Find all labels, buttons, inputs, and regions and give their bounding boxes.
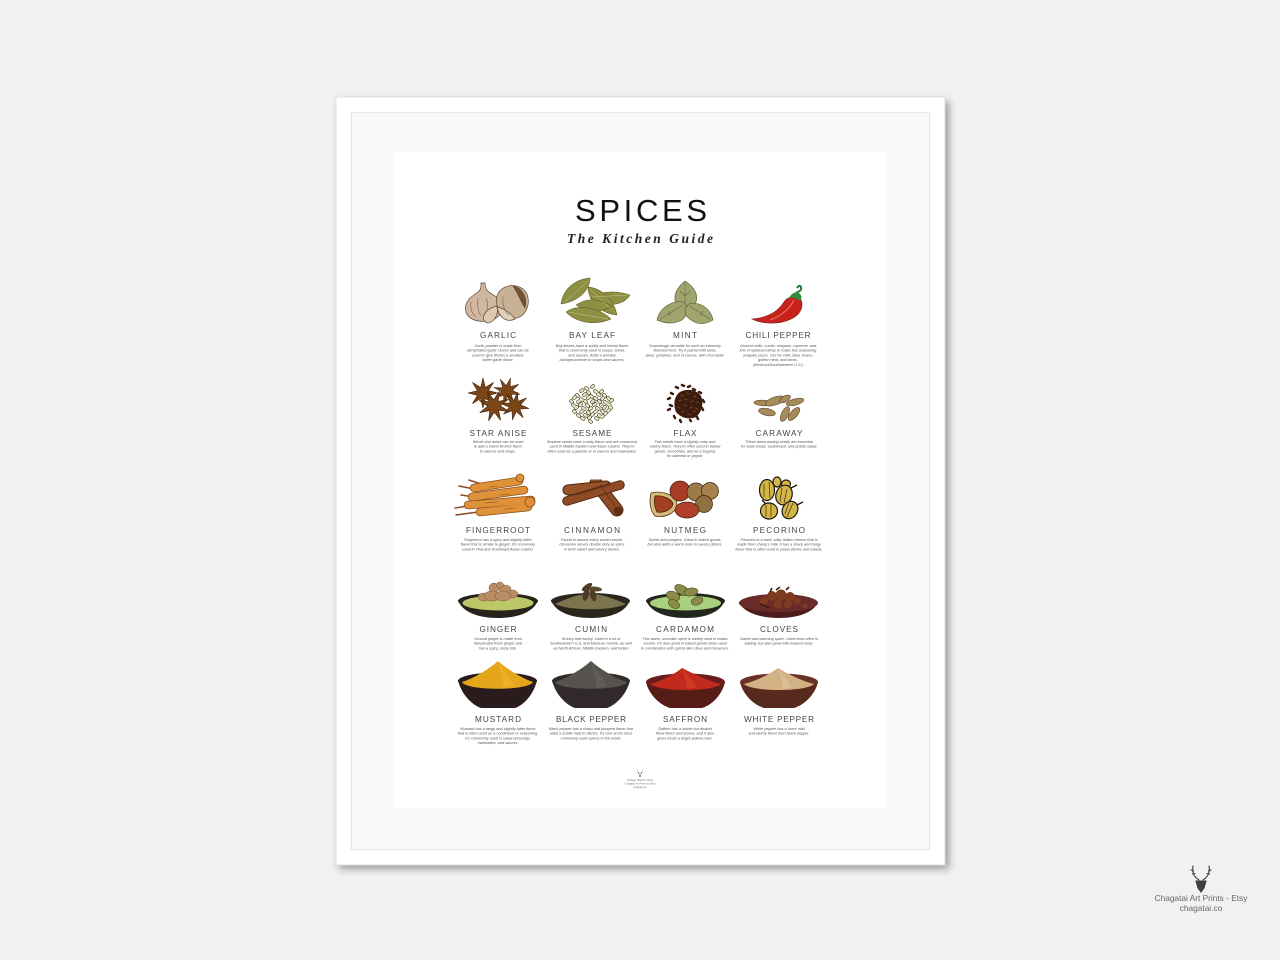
- watermark text: Chagatai Art Prints - Etsy: [1155, 893, 1248, 903]
- description: cinnamon serves double duty as spice: [559, 543, 625, 547]
- description: backgroundnote to soups and sauces.: [560, 358, 624, 362]
- footer text: Chatgai 1930 Art Store: [627, 778, 654, 782]
- item: white pepper: [740, 668, 818, 736]
- icon: cinnamon sticks: [567, 483, 622, 516]
- description: Smoky and earthy. Used in a lot of: [562, 637, 621, 641]
- description: baking, but also good with braised meat.: [745, 642, 813, 646]
- watermark text: chagatai.co: [1180, 903, 1223, 913]
- description: dehydrated garlic cloves and can be: [467, 349, 529, 353]
- description: Found in almost every world cuisine,: [561, 538, 623, 542]
- label: FLAX: [674, 429, 697, 438]
- description: to sauces and soups.: [480, 449, 516, 453]
- description: made from sheep's milk. It has a sharp and tangy: [737, 543, 822, 547]
- description: Sweet and pungent. Great in baked goods,: [648, 538, 722, 542]
- description: flavor that is often used in pasta dishes and salads.: [735, 547, 823, 551]
- icon: fingerroot bundle: [455, 474, 535, 515]
- description: flavor that is similar to ginger. It's commonly: [461, 543, 536, 547]
- title: SPICES: [575, 193, 707, 228]
- description: White pepper has a more mild: [753, 727, 805, 731]
- description: that is commonly used in soups, stews,: [559, 349, 625, 353]
- description: This warm, aromatic spice is widely used in Indian: [642, 637, 728, 641]
- description: in both sweet and savory dishes.: [564, 547, 620, 551]
- icon: deer head: [1191, 866, 1211, 892]
- label: STAR ANISE: [470, 429, 527, 438]
- description: used to give dishes a smoked,: [472, 353, 524, 357]
- icon: nutmeg: [650, 481, 718, 518]
- item: bay leaf: [556, 278, 630, 362]
- label: CINNAMON: [564, 526, 620, 535]
- description: floral flavor and aroma, and it also: [656, 732, 715, 736]
- item: pecorino: [735, 477, 823, 551]
- item: cloves: [739, 587, 818, 646]
- icon: star anise: [468, 374, 532, 426]
- description: It's commonly used in salad dressings,: [465, 736, 531, 740]
- label: WHITE PEPPER: [744, 715, 814, 724]
- description: Ground ginger is made from: [474, 637, 523, 641]
- icon: mustard powder bowl: [458, 661, 537, 708]
- description: but also adds a warm note to savory dishes.: [648, 543, 722, 547]
- item: nutmeg: [648, 481, 722, 547]
- description: These anise-tasting seeds are essential: [745, 440, 813, 444]
- item: black pepper: [549, 661, 634, 740]
- description: peas, potatoes, and of course, with chocolate!: [645, 353, 725, 357]
- label: BAY LEAF: [569, 331, 615, 340]
- item: cumin: [550, 582, 632, 650]
- watermark: [1155, 866, 1248, 913]
- description: Bay leaves have a subtly and herbal flavor: [556, 344, 629, 348]
- label: FINGERROOT: [466, 526, 530, 535]
- label: PECORINO: [753, 526, 805, 535]
- description: gives foods a bright yellow color.: [657, 736, 713, 740]
- description: in combination with spices like clove and cinnamon.: [641, 646, 729, 650]
- description: Fingerroot has a spicy and slightly bitter: [464, 538, 533, 542]
- icon: saffron bowl: [646, 668, 725, 708]
- description: cuisine. It's also great in baked goods when used: [643, 642, 728, 646]
- poster footer: [624, 769, 656, 789]
- icon: white pepper bowl: [740, 668, 818, 708]
- item: ginger: [458, 582, 538, 650]
- description: goods, smoothies, and as a topping: [655, 449, 716, 453]
- label: CUMIN: [575, 625, 607, 634]
- item: flax: [650, 385, 721, 458]
- label: BLACK PEPPER: [556, 715, 626, 724]
- footer text: Chagatai Art Prints on Etsy: [624, 782, 656, 786]
- description: softer garlic flavor.: [482, 358, 514, 362]
- description: Ground chilis, cumin, oregano, cayenne, and: [740, 344, 817, 348]
- label: GARLIC: [480, 331, 516, 340]
- item: garlic: [465, 283, 529, 362]
- description: often used as a garnish or in sauces and marinades.: [547, 449, 637, 453]
- picture frame: [336, 97, 949, 869]
- subtitle: The Kitchen Guide: [567, 231, 713, 246]
- item: mustard: [458, 661, 538, 745]
- description: flavored herb. Try it paired with lamb,: [654, 349, 716, 353]
- description: for oatmeal or yogurt.: [667, 454, 703, 458]
- item: cinnamon: [559, 483, 625, 551]
- icon: small deer: [637, 769, 643, 777]
- label: SESAME: [572, 429, 612, 438]
- description: marinades, and sauces.: [478, 741, 518, 745]
- icon: cumin in dish: [551, 582, 630, 618]
- label: CLOVES: [760, 625, 799, 634]
- item: sesame: [547, 386, 638, 453]
- description: Saffron has a subtle but distinct: [658, 727, 713, 731]
- label: CARAWAY: [756, 429, 803, 438]
- description: as North African, Middle Eastern, and Indian: [553, 646, 629, 650]
- label: CHILI PEPPER: [746, 331, 811, 340]
- icon: bay leaves: [561, 278, 630, 323]
- icon: mint leaves: [657, 281, 713, 323]
- description: Mustard has a tangy and slightly bitter flavor: [460, 727, 536, 731]
- icon: chili pepper: [752, 286, 802, 323]
- description: used in Thai and Southeast Asian cuisine.: [462, 547, 534, 551]
- description: Southwestern U.S. and Mexican cuisine, as well: [550, 642, 632, 646]
- description: Flax seeds have a slightly nutty and: [655, 440, 716, 444]
- icon: garlic: [465, 283, 528, 323]
- description: and sauces. Adds a woodsy: [568, 353, 617, 357]
- description: Pecorino is a hard, salty Italian cheese that is: [740, 538, 818, 542]
- label: SAFFRON: [663, 715, 707, 724]
- icon: flax seeds: [668, 385, 704, 422]
- icon: pecorino pods: [760, 477, 803, 522]
- item: cardamom: [641, 582, 729, 650]
- description: Garlic powder is made from: [474, 344, 522, 348]
- description: and earthy flavor than black pepper.: [748, 732, 810, 736]
- icon: caraway seeds: [754, 393, 805, 423]
- item: star anise: [468, 374, 532, 453]
- description: Sesame seeds have a nutty flavor and are commonly: [547, 440, 638, 444]
- description: used in Middle Eastern and Asian cuisine. They're: [550, 445, 634, 449]
- description: Sweet and warming spice. Used most often in: [740, 637, 818, 641]
- description: lots of optional extras to make this seasoning: [740, 349, 817, 353]
- icon: ginger in dish: [458, 582, 538, 618]
- description: has a spicy, zesty bite.: [479, 646, 517, 650]
- label: CARDAMOM: [656, 625, 714, 634]
- label: NUTMEG: [664, 526, 706, 535]
- description: uniquely yours. Use for chili, stew, beans,: [743, 353, 813, 357]
- description: earthy flavor. They're often used in baked: [650, 445, 721, 449]
- description: Surprisingly versatile for such an intensely: [649, 344, 722, 348]
- icon: sesame seeds: [571, 386, 612, 422]
- item: mint: [645, 281, 725, 357]
- description: (Mexican/Southwestern U.S.): [753, 363, 804, 367]
- item: caraway: [741, 393, 817, 449]
- icon: black pepper bowl: [552, 661, 630, 708]
- description: commonly used spices in the world.: [561, 736, 621, 740]
- icon: cloves in dish: [739, 587, 818, 618]
- description: Whole star anise can be used: [473, 440, 524, 444]
- description: dehydrated fresh ginger and: [474, 642, 523, 646]
- description: that is often used as a condiment or seasoning.: [458, 732, 538, 736]
- description: grilled meat, and tacos.: [758, 358, 798, 362]
- label: MUSTARD: [475, 715, 521, 724]
- label: GINGER: [480, 625, 517, 634]
- item: fingerroot: [455, 474, 536, 551]
- description: Black pepper has a sharp and pungent flavor that: [549, 727, 634, 731]
- item: saffron: [646, 668, 725, 740]
- footer text: chagatai.co: [633, 785, 647, 789]
- description: for soda bread, sauerkraut, and potato salad.: [741, 445, 817, 449]
- label: MINT: [673, 331, 697, 340]
- icon: cardamom in dish: [646, 582, 725, 618]
- item: chili pepper: [740, 286, 817, 367]
- description: to add a sweet licorice flavor: [474, 445, 523, 449]
- description: adds a subtle heat to dishes. It's one of the most: [550, 732, 633, 736]
